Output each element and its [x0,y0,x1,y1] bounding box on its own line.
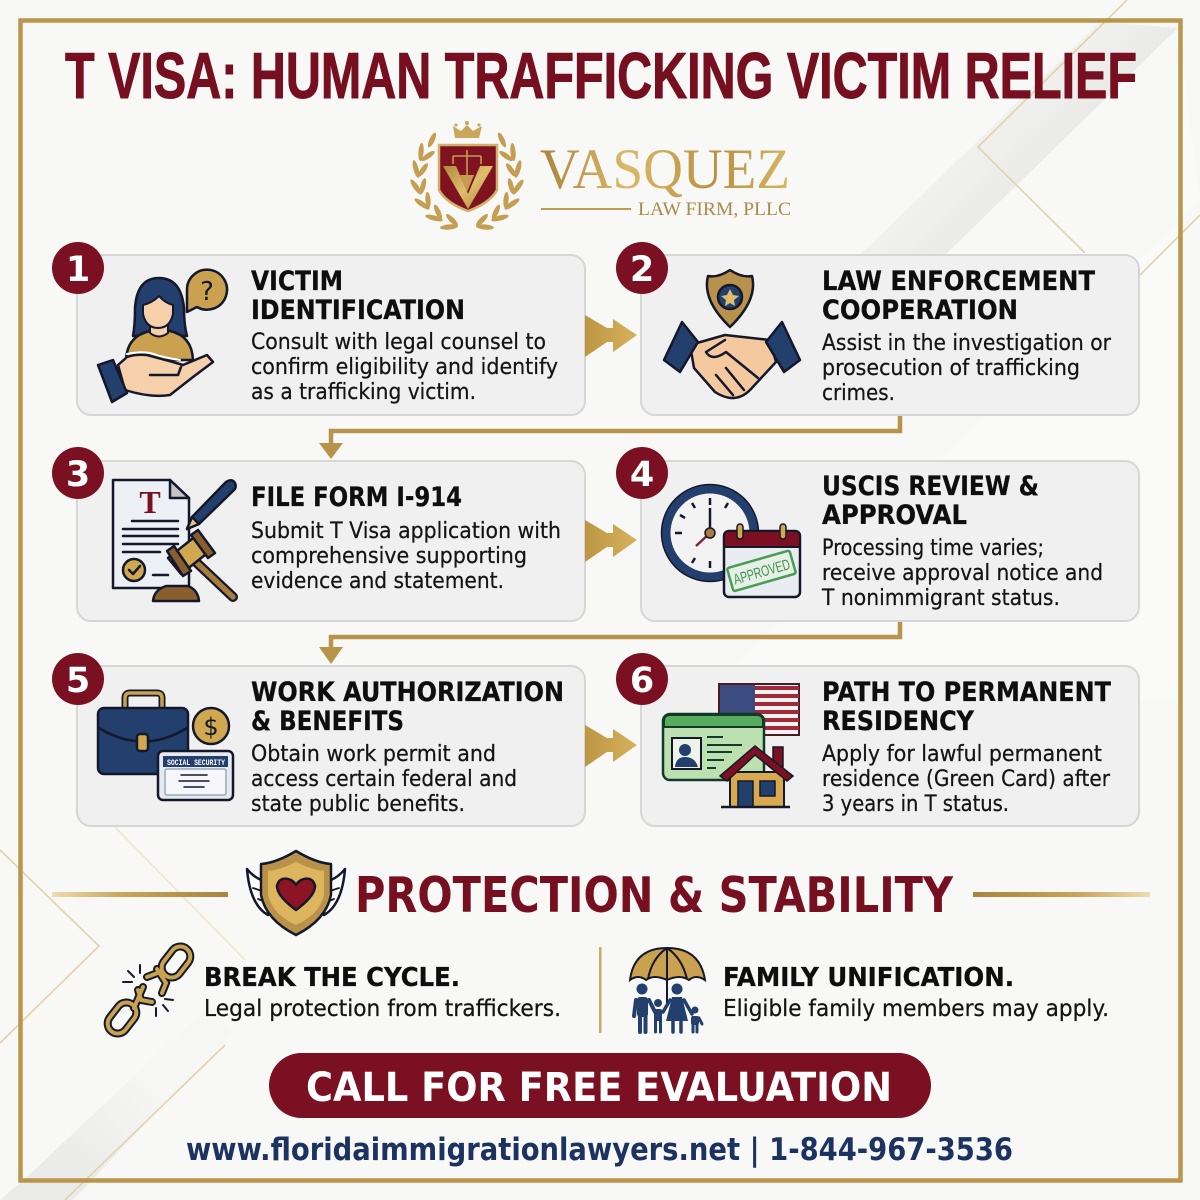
number badge 6: 6 [630,661,654,701]
logo subtitle: LAW FIRM, PLLC [638,199,791,220]
logo: Vasquez Law Firm [409,121,791,230]
icon: briefcase, coin and benefits card: $ [203,713,219,741]
website and phone: www.floridaimmigrationlawyers.net | 1-844-967-3536 [186,1132,1013,1168]
icon: document, pen and gavel [113,480,236,601]
number badge 3: 3 [66,455,90,495]
heading: FILE FORM I-914 [251,482,462,513]
heading: RESIDENCY [822,706,974,737]
arrow: step 1 to 2 [585,315,637,357]
body text [822,330,1112,406]
icon: person in hand with question: ? [200,277,214,307]
body text: crimes. [822,380,895,406]
body text: Consult with legal counsel to [251,329,546,355]
heading [251,677,564,737]
panel: step 4 [616,447,1139,621]
icon: briefcase, coin and benefits card [98,693,233,800]
icon: document, pen and gavel: T [139,484,161,520]
body text: state public benefits. [251,791,465,817]
icon: broken chain [104,942,194,1038]
panel: step 6 [616,653,1139,826]
icon: crown [453,121,482,138]
body text: as a trafficking victim. [251,379,476,405]
heading: IDENTIFICATION [251,295,465,326]
body text: 3 years in T status. [822,791,1009,817]
icon: person in hand with question [98,270,227,402]
body text: Submit T Visa application with [251,518,561,544]
body text: access certain federal and [251,766,517,792]
heading: PATH TO PERMANENT [822,677,1112,708]
body text: Apply for lawful permanent [822,741,1102,767]
heading: & BENEFITS [251,706,404,737]
arrow: step 3 to 4 [585,520,637,562]
panel: step 1 [52,242,585,415]
number badge 1: 1 [66,250,90,290]
icon: clock and approved calendar [662,484,800,597]
heading: USCIS REVIEW & [822,471,1039,502]
heading: COOPERATION [822,295,1018,326]
number badge 2: 2 [630,250,654,290]
icon: briefcase, coin and benefits card: SOCIAL SECURITY [167,759,225,768]
icon: flag, green card and house [663,684,799,807]
heading: LAW ENFORCEMENT [822,266,1096,297]
heading [822,266,1096,326]
number badge 1 [52,242,104,294]
body text [821,535,1103,611]
call to action button: CALL FOR FREE EVALUATION [306,1065,892,1111]
heading: VICTIM [251,266,343,297]
text: break the cycle: BREAK THE CYCLE. [204,963,460,993]
arrow: step 5 to 6 [585,725,637,767]
icon: crest shield [439,145,497,211]
connector arrow: step 4 to 5 [319,622,900,664]
number badge 5: 5 [66,661,90,701]
heading [822,471,1039,531]
icon: handshake with badge [664,270,800,398]
icon: winged shield with heart [247,851,345,935]
connector arrow: step 2 to 3 [319,416,900,459]
text: break the cycle [204,963,561,1022]
panel: step 2 [616,242,1139,415]
body text [251,518,561,594]
body text [251,329,558,405]
number badge 5 [52,653,104,705]
heading: protection and stability: PROTECTION & STABILITY [355,867,953,924]
text: family unification [723,963,1109,1022]
body text: T nonimmigrant status. [821,585,1060,611]
number badge 6 [616,653,668,705]
heading: WORK AUTHORIZATION [251,677,564,708]
logo wordmark: VASQUEZ [540,138,790,201]
heading: APPROVAL [822,500,967,531]
body text: prosecution of trafficking [822,355,1080,381]
text: family unification: FAMILY UNIFICATION. [723,963,1014,993]
body text: confirm eligibility and identify [251,354,558,380]
call to action button [269,1053,931,1118]
heading [251,266,465,326]
body text [251,741,517,817]
number badge 4: 4 [630,455,654,495]
icon: laurel wreath [409,132,525,230]
body text: evidence and statement. [251,568,504,594]
panel: step 5 [52,653,585,826]
body text: Assist in the investigation or [822,330,1112,356]
heading [822,677,1112,737]
panel: step 3 [52,447,585,621]
icon: clock and approved calendar: APPROVED [732,556,792,588]
body text: comprehensive supporting [251,543,527,569]
body text: Processing time varies; [822,535,1044,561]
body text [822,741,1111,817]
number badge 4 [616,447,668,499]
number badge 3 [52,447,104,499]
body text: residence (Green Card) after [822,766,1111,792]
body text: receive approval notice and [822,560,1103,586]
text: family unification: Eligible family members may apply. [723,996,1109,1022]
text: break the cycle: Legal protection from traffickers. [204,996,561,1022]
number badge 2 [616,242,668,294]
icon: family under umbrella [630,948,705,1032]
body text: Obtain work permit and [251,741,496,767]
